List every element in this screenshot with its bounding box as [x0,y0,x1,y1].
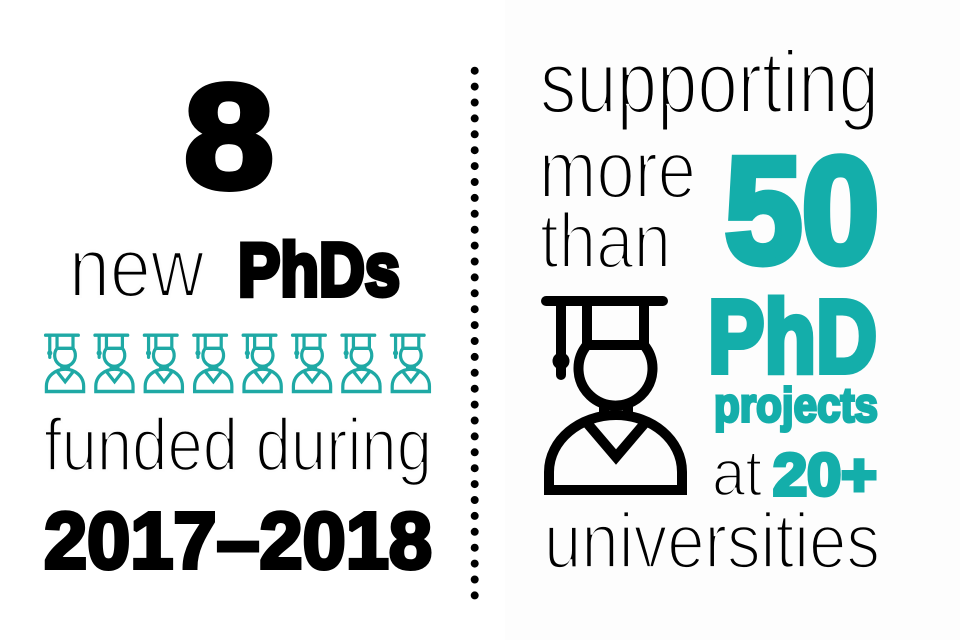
icon: graduate 2 [95,335,133,392]
icon: graduate 6 [293,335,331,392]
icon: graduate 4 [194,335,232,392]
text: universities: universities [544,496,880,584]
text: projects: projects [714,380,878,432]
heading number: 8: 8 [184,54,274,220]
icon: large graduate [546,301,682,490]
text: supporting: supporting [540,32,879,132]
number: 50: 50 [725,126,879,294]
text: funded during: funded during [44,404,432,486]
text: more: more [539,124,696,216]
left panel background [0,0,505,640]
icon: graduate 1 [46,335,84,392]
text: 20+: 20+ [773,442,877,508]
text: at: at [712,436,762,510]
text: PhD: PhD [708,279,877,394]
text: than: than [540,196,671,284]
icon: graduate 3 [144,335,182,392]
text: 2017–2018: 2017–2018 [44,496,432,585]
icon: graduate 7 [342,335,380,392]
text: PhDs: PhDs [238,228,400,312]
icon row: eight graduates [46,335,429,392]
icon: graduate 8 [391,335,429,392]
text: new: new [69,220,204,314]
dotted divider [471,71,479,596]
icon: graduate 5 [243,335,281,392]
